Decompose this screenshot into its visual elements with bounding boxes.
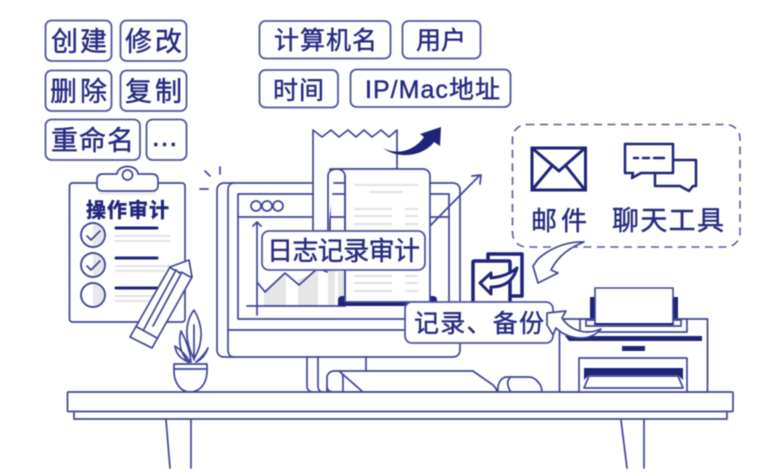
mouse	[498, 377, 542, 392]
line chart	[247, 222, 345, 315]
clipboard heading: 操作审计	[86, 198, 169, 222]
tag: 用户	[402, 21, 480, 58]
log document	[328, 169, 437, 306]
tag: 复制	[120, 70, 186, 111]
monitor	[217, 183, 460, 392]
return arrow: printer to backup	[547, 311, 601, 338]
panel: notification channels	[512, 124, 740, 247]
curved arrow: channels to backup	[533, 242, 584, 283]
clipboard clip	[97, 166, 158, 191]
desk leg: left	[166, 420, 191, 468]
printer	[560, 288, 708, 392]
tag: 计算机名	[260, 21, 390, 58]
checklist	[81, 223, 170, 307]
pencil	[130, 260, 192, 348]
tag: 删除: 删除	[50, 77, 107, 107]
group: attribute tags	[260, 21, 510, 108]
keyboard	[327, 371, 497, 392]
tag: 修改: 修改	[125, 27, 182, 57]
label: 聊天工具: 聊天工具	[612, 206, 724, 236]
tag: 记录、备份: 记录、备份	[414, 310, 544, 338]
label: 邮件: 邮件	[531, 206, 587, 236]
tag: 重命名	[46, 120, 140, 160]
tag: 用户: 用户	[416, 27, 466, 55]
tag: 创建	[46, 20, 112, 61]
tag: 重命名: 重命名	[51, 126, 134, 156]
tag: IP/Mac地址: IP/Mac地址	[365, 76, 500, 104]
back receipt paper	[313, 130, 397, 231]
tag: 时间	[260, 70, 338, 108]
tag: 计算机名: 计算机名	[274, 27, 377, 55]
tag: 时间: 时间	[273, 77, 324, 105]
tag: 复制: 复制	[125, 77, 182, 107]
icon: envelope	[532, 148, 586, 190]
diagonal arrow	[424, 175, 481, 232]
sparkle	[200, 167, 220, 189]
clipboard: 操作审计	[70, 166, 192, 348]
sync icon	[473, 254, 522, 303]
tag: more	[146, 120, 186, 160]
icon: chat bubbles	[625, 144, 696, 191]
dark curved arrow	[383, 127, 441, 155]
tag: 修改	[120, 20, 186, 61]
printer paper	[580, 288, 687, 332]
plant	[174, 310, 208, 392]
desk leg: right	[621, 420, 644, 468]
printer tray	[579, 358, 687, 392]
group: operation tags	[46, 20, 186, 160]
tag: 创建: 创建	[51, 27, 107, 57]
tag: IP/Mac地址	[350, 70, 510, 107]
monitor screen	[238, 194, 449, 319]
desk	[68, 392, 733, 468]
monitor stand	[307, 357, 366, 392]
tag: 记录、备份	[405, 302, 553, 343]
tag: more: ...	[153, 129, 176, 151]
tag: 日志记录审计: 日志记录审计	[267, 236, 420, 266]
tag: 删除	[46, 70, 112, 111]
